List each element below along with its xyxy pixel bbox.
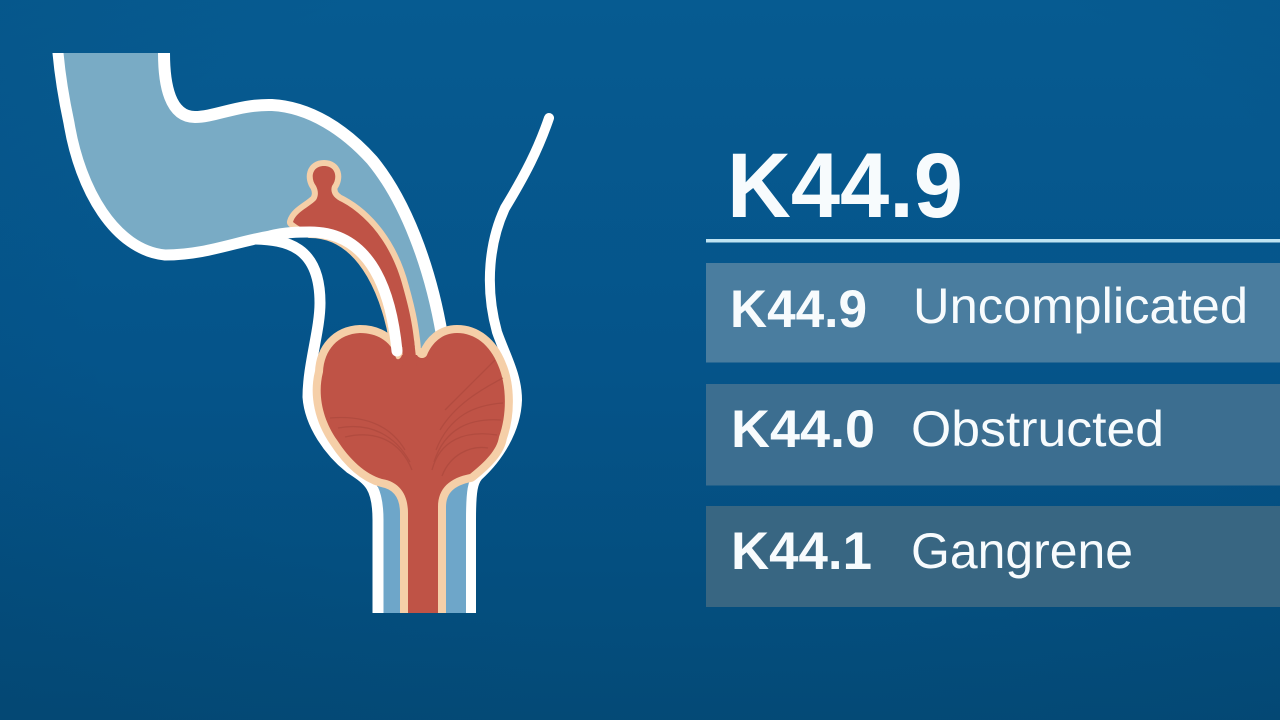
row: K44.1 Gangrene: K44.1	[731, 522, 872, 581]
muscle fold texture	[330, 360, 503, 476]
light blue abdominal cavity	[58, 53, 442, 360]
row: K44.0 Obstructed	[706, 384, 1280, 486]
row: K44.0 Obstructed: K44.0	[731, 400, 875, 459]
row: K44.1 Gangrene	[706, 506, 1280, 607]
neck red connection	[402, 340, 416, 355]
upper wall line	[164, 45, 442, 335]
right body wall line and right sac outline	[471, 118, 549, 620]
row: K44.9 Uncomplicated: Uncomplicated	[913, 278, 1248, 334]
anatomical illustration: hernia	[58, 45, 549, 640]
herniated tube with knob	[293, 166, 416, 362]
left and lower wall line	[58, 45, 397, 351]
inner peritoneal line and left sac outline	[255, 239, 378, 620]
row: K44.9 Uncomplicated: K44.9	[730, 280, 867, 339]
title code: K44.9	[727, 135, 963, 237]
row: K44.9 Uncomplicated	[706, 263, 1280, 362]
lower sac blue tube	[378, 478, 471, 618]
row: K44.1 Gangrene: Gangrene	[911, 523, 1133, 579]
bulb body	[321, 333, 505, 640]
bulb: strangulated bowel	[321, 333, 505, 640]
row: K44.0 Obstructed: Obstructed	[911, 401, 1164, 457]
divider under title	[706, 239, 1280, 242]
